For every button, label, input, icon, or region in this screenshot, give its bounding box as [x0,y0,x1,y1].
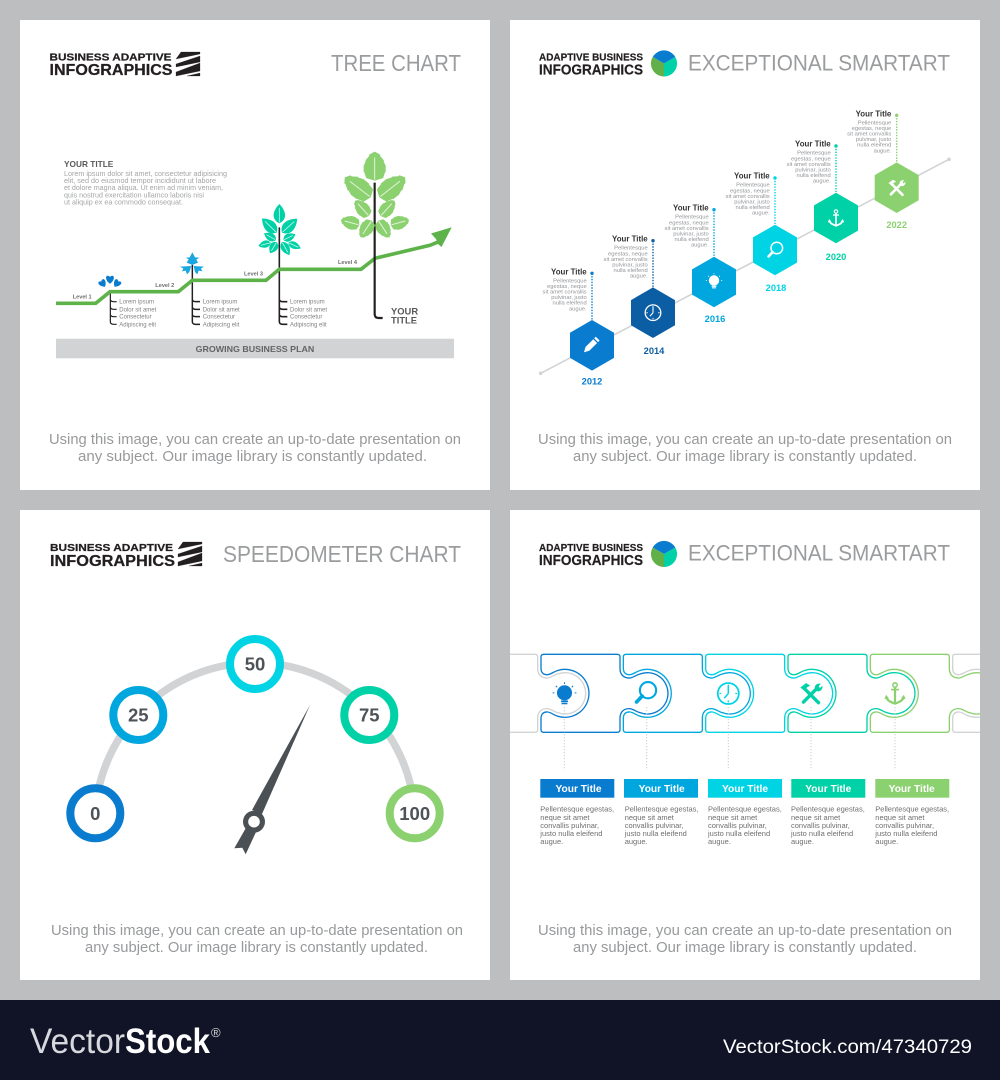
gauge needle [234,705,310,854]
step 2018: 2018 [766,283,786,293]
tree 2 leaves [180,252,204,274]
panel: tree chart [20,20,490,490]
step 2012: Your Title [551,267,587,276]
caption [51,922,463,956]
column 1: justo nulla eleifend [539,829,602,838]
tree 3 list: Dolor sit amet [290,307,327,313]
tree 3 leaves [258,204,302,257]
step 2016 [665,204,736,324]
step 2014 [604,235,675,356]
column 1 [539,779,614,846]
gauge marker 75: 75 [359,704,380,726]
panel background [510,20,980,490]
step 2012: nulla eleifend [553,301,587,307]
tree 1 list: Dolor sit amet [119,307,157,313]
step 2016: egestas, neque [669,220,709,226]
column 2: justo nulla eleifend [624,829,687,838]
text block: your title intro: quis nostrud exercitation ullamco laboris nisi [64,190,204,199]
step 2016: nulla eleifend [675,237,709,243]
gauge marker 50: 50 [245,654,265,674]
column 1: Pellentesque egestas, [540,805,614,814]
caption [538,922,952,956]
tree 4 stem [375,183,383,318]
panel: timeline smartart [510,20,980,490]
icon: clock [718,683,739,704]
logo: business adaptive infographics: INFOGRAPHICS [50,62,172,79]
column 1: Your Title [555,784,602,795]
step 2022: 2022 [886,220,907,230]
step 2022: nulla eleifend [857,143,891,149]
column 4: augue. [791,837,814,846]
step 2014: pulvinar, justo [612,262,648,268]
column 5: Your Title [889,784,935,795]
column 4: Your Title [805,784,852,795]
icon: anchor [884,683,906,704]
step 2018: sit amet convallis [726,194,770,200]
gauge marker 25: 25 [128,704,149,726]
level labels [73,260,358,300]
tree 1 list: Lorem ipsum [119,300,154,306]
icon: light bulb [553,682,576,704]
footer logo: Stock [125,1022,210,1061]
step 2014: Your Title [612,235,648,244]
tree 1 list: Adipiscing elit [119,322,156,328]
step 2014: Pellentesque [614,246,648,252]
text block: your title intro: YOUR TITLE [64,159,114,169]
level labels: Level 1 [73,294,92,300]
step 2016: Pellentesque [675,215,709,221]
caption: any subject. Our image library is constantly updated. [78,448,427,465]
text block: your title intro [64,159,227,206]
step 2020: pulvinar, justo [795,168,831,174]
caption: any subject. Our image library is constantly updated. [573,448,917,465]
caption [49,431,461,465]
step 2018: egestas, neque [730,188,770,194]
logo: adaptive business infographics: INFOGRAPHICS [539,553,643,569]
logo: adaptive business infographics: ADAPTIVE BUSINESS [539,543,643,554]
logo: adaptive business infographics: INFOGRAPHICS [539,62,643,78]
your title label: TITLE [391,315,417,326]
gauge marker 0 [70,788,120,838]
column 2: Pellentesque egestas, [625,805,699,814]
text block: your title intro: Lorem ipsum dolor sit amet, consectetur adipisicing [64,169,227,178]
step 2022: sit amet convallis [847,132,891,138]
column 2 [624,779,699,846]
tree 3 list: Adipiscing elit [290,322,327,328]
text block: your title intro: et dolore magna aliqua. Ut enim ad minim veniam, [64,183,223,192]
tree 1 stem and branches [110,290,117,324]
step 2022 [847,109,919,230]
growth line with arrow [56,227,452,303]
timeline axis [539,158,951,375]
caption: Using this image, you can create an up-to-date presentation on [538,431,952,448]
step 2016: sit amet convallis [665,226,709,232]
column 4 [790,779,865,846]
level labels: Level 4 [338,260,358,266]
step 2014: 2014 [644,346,665,356]
step 2012: pulvinar, justo [551,295,587,301]
column 5: neque sit amet [875,813,925,822]
step 2014: augue. [630,274,648,280]
gauge marker 50 [230,639,280,689]
logo: adaptive business infographics [539,541,677,569]
column 2: convallis pulvinar, [625,821,683,830]
footer logo [30,1022,221,1061]
caption [538,431,952,465]
column 1: neque sit amet [540,813,590,822]
gauge marker 100: 100 [399,803,430,824]
column 2: augue. [625,837,648,846]
column 3: neque sit amet [708,813,758,822]
gauge marker 100 [390,788,440,838]
step 2022: egestas, neque [852,126,891,132]
step 2018: pulvinar, justo [734,200,770,206]
step 2014: sit amet convallis [604,257,648,263]
logo: business adaptive infographics [50,542,202,570]
caption: Using this image, you can create an up-to-date presentation on [538,922,952,939]
tree 3 list: Consectetur [290,315,322,321]
step 2020: Pellentesque [797,151,831,157]
gauge marker 75 [344,690,394,740]
step 2012 [543,267,614,386]
step 2016: Your Title [673,204,709,213]
step 2022: Pellentesque [858,120,891,126]
column 4: neque sit amet [791,813,841,822]
logo: business adaptive infographics [50,52,200,79]
column 4: convallis pulvinar, [791,821,850,830]
panel: speedometer chart [20,510,490,980]
logo: business adaptive infographics: INFOGRAPHICS [50,553,175,570]
your title label: YOUR [391,305,418,316]
caption: any subject. Our image library is constantly updated. [573,939,917,956]
column 2: Your Title [639,784,685,795]
step 2012: sit amet convallis [543,290,587,296]
step 2020: augue. [813,179,831,185]
step 2012: augue. [569,306,587,312]
step 2016: augue. [691,243,709,249]
step 2016: 2016 [705,314,725,324]
column 3: augue. [708,837,731,846]
tree 2 list: Lorem ipsum [203,300,237,306]
step 2020: sit amet convallis [787,162,831,168]
logo: business adaptive infographics: BUSINESS ADAPTIVE [50,52,172,63]
tree 3 list: Lorem ipsum [290,300,325,306]
step 2020: Your Title [795,140,831,149]
step 2014: nulla eleifend [614,268,648,274]
tree 1 list [119,300,157,328]
step 2018: nulla eleifend [736,205,770,211]
column 3: Pellentesque egestas, [708,805,782,814]
heading: exceptional smartart: EXCEPTIONAL SMARTART [688,50,950,76]
column 2: neque sit amet [625,813,675,822]
column 1: augue. [540,837,563,846]
column 3: convallis pulvinar, [708,821,767,830]
step 2022: Your Title [856,109,892,118]
column 3: Your Title [722,784,768,795]
footer logo: ® [211,1025,221,1040]
tree 1 leaves [98,276,122,289]
step 2012: 2012 [582,376,602,386]
logo: adaptive business infographics: ADAPTIVE BUSINESS [539,53,643,64]
column 5: justo nulla eleifend [874,829,937,838]
step 2020: egestas, neque [791,156,831,162]
column 4: Pellentesque egestas, [791,805,865,814]
puzzle chain [510,654,980,733]
step 2012: Pellentesque [553,278,587,284]
step 2012: egestas, neque [547,284,587,290]
tree 4 leaves [339,152,411,241]
tree 2 list: Dolor sit amet [203,307,240,313]
column 5: convallis pulvinar, [875,821,934,830]
panel background [20,20,490,490]
gauge arc [95,663,415,813]
column 4: justo nulla eleifend [790,829,853,838]
text block: your title intro: ut aliquip ex ea commodo consequat. [64,197,183,206]
logo: adaptive business infographics [539,50,677,78]
step 2022: augue. [874,148,892,154]
column 3 [707,779,782,846]
plan bar: GROWING BUSINESS PLAN [196,344,314,354]
step 2018: Pellentesque [736,183,770,189]
panel background [510,510,980,980]
gauge marker 25 [113,690,163,740]
step 2018: augue. [752,211,770,217]
footer url: VectorStock.com/47340729 [723,1036,972,1058]
step 2020: 2020 [826,252,846,262]
footer bar [0,1000,1000,1080]
caption: Using this image, you can create an up-to-date presentation on [51,922,463,939]
column 5: Pellentesque egestas, [875,805,949,814]
step 2020: nulla eleifend [797,173,831,179]
panel background [20,510,490,980]
level labels: Level 3 [244,272,263,278]
tree 2 stem and branches [192,265,200,324]
step 2016: pulvinar, justo [673,232,709,238]
caption: any subject. Our image library is constantly updated. [85,939,428,956]
heading: speedometer chart: SPEEDOMETER CHART [223,541,461,567]
column 5: augue. [875,837,898,846]
caption: Using this image, you can create an up-to-date presentation on [49,431,461,448]
footer logo: Vector [30,1022,125,1061]
panel: puzzle smartart [510,510,980,980]
step 2014: egestas, neque [608,251,648,257]
your title label [391,305,418,326]
level labels: Level 2 [155,283,174,289]
tree 3 list [290,300,327,328]
column 1: convallis pulvinar, [540,821,599,830]
step 2018 [726,172,797,293]
heading: exceptional smartart: EXCEPTIONAL SMARTART [688,540,950,566]
column 5 [874,779,949,846]
column 3: justo nulla eleifend [707,829,770,838]
tree 2 list: Consectetur [203,315,235,321]
logo: business adaptive infographics: BUSINESS ADAPTIVE [50,543,173,554]
connector lines [564,707,895,770]
gauge marker 0: 0 [90,803,100,824]
icon: magnifier [637,682,656,702]
tree 3 stem and branches [279,227,287,324]
text block: your title intro: elit, sed do eiusmod tempor incididunt ut labore [64,176,216,185]
tree 2 list: Adipiscing elit [203,322,240,328]
step 2022: pulvinar, justo [856,137,891,143]
plan bar [56,339,454,358]
step 2018: Your Title [734,172,770,181]
step 2020 [787,140,858,262]
tree 1 list: Consectetur [119,315,152,321]
heading: tree chart: TREE CHART [331,50,461,76]
icon: tools [800,683,822,703]
tree 2 list [203,300,240,328]
